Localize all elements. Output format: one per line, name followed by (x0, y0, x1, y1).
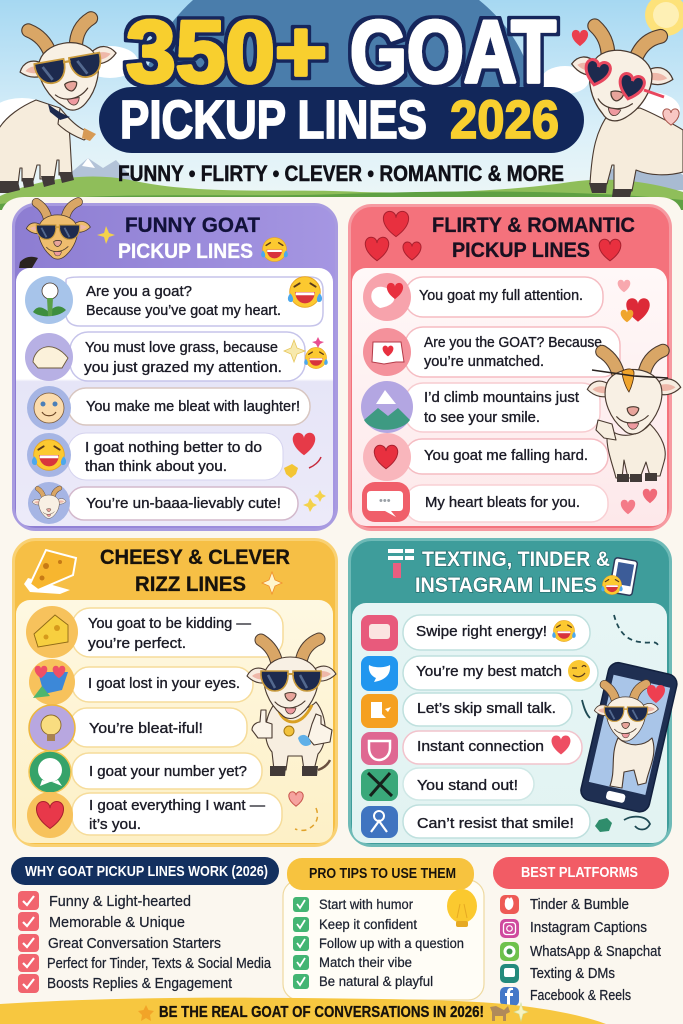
row 2: You’re my best match (416, 664, 562, 680)
panel heading: TEXTING, TINDER & (422, 547, 610, 571)
panel heading (415, 547, 610, 597)
icon: facebook (500, 987, 519, 1006)
platform list (500, 895, 661, 1006)
section pill: PRO TIPS TO USE THEM (309, 865, 456, 882)
small heart right (663, 109, 679, 125)
green hills (0, 177, 683, 210)
row 1: you’re perfect. (88, 636, 186, 652)
row 3: I’d climb mountains just (424, 390, 579, 406)
panel heading (432, 213, 635, 262)
platform list: Instagram Captions (530, 920, 647, 936)
section: pro tips (283, 858, 484, 1000)
goat: left with sunglasses (0, 15, 125, 193)
section pill (287, 858, 474, 890)
row 6 (361, 805, 590, 838)
checklist: Great Conversation Starters (48, 936, 221, 952)
message bars icon (388, 549, 414, 578)
checklist (18, 891, 272, 993)
row 1: You goat my full attention. (419, 288, 583, 304)
sun (645, 0, 683, 36)
icon: tiny goat (490, 1006, 510, 1021)
title pill: pickup lines 2026: PICKUP LINES (120, 90, 427, 150)
platform list: Texting & DMs (530, 966, 615, 982)
footer text: BE THE REAL GOAT OF CONVERSATIONS IN 2026! (159, 1004, 484, 1021)
checklist: Memorable & Unique (49, 915, 185, 931)
panel: cheesy and clever rizz lines (14, 540, 336, 846)
row 2: Are you the GOAT? Because (424, 335, 602, 351)
row 5: You’re un-baaa-lievably cute! (86, 496, 281, 512)
checklist: Perfect for Tinder, Texts & Social Media (47, 956, 272, 972)
row 5: My heart bleats for you. (425, 495, 580, 511)
sparkles (97, 226, 115, 244)
row 5 (27, 792, 282, 838)
platform list: Facebook & Reels (530, 988, 631, 1004)
row 2: I goat lost in your eyes. (88, 676, 240, 692)
row 4 (29, 751, 262, 793)
row 4 (361, 731, 582, 765)
header banner (0, 0, 683, 210)
header hearts (365, 211, 621, 261)
checklist: Funny & Light-hearted (49, 894, 191, 910)
row 4 (363, 433, 608, 481)
row 4 (27, 433, 321, 480)
subtitle: FUNNY • FLIRTY • CLEVER • ROMANTIC & MORE (118, 161, 564, 186)
tips checklist: Be natural & playful (319, 974, 433, 989)
tips checklist: Keep it confident (319, 917, 417, 932)
heart sunglasses (582, 58, 664, 102)
row 4: I goat nothing better to do (85, 440, 262, 456)
row 2: you’re unmatched. (424, 354, 544, 370)
row 5 (361, 768, 534, 801)
panel: texting tinder and instagram lines (350, 540, 683, 846)
phone with goat (569, 658, 683, 816)
goat head mascot (19, 202, 90, 268)
icon: tinder (500, 895, 519, 914)
tips checklist: Start with humor (319, 897, 413, 912)
panel heading (100, 545, 290, 596)
scattered hearts (618, 280, 657, 514)
mountains (0, 132, 683, 190)
goat with heart glasses (587, 351, 681, 482)
platform list: Tinder & Bumble (530, 897, 629, 913)
panel heading: RIZZ LINES (135, 572, 246, 596)
sky backdrop (0, 0, 683, 205)
icon: star (138, 1005, 154, 1021)
panel heading: PICKUP LINES (452, 238, 590, 262)
goat on phone screen (594, 684, 665, 788)
checklist: Boosts Replies & Engagement (47, 976, 232, 992)
row 5: it’s you. (89, 817, 141, 833)
section: best platforms (493, 857, 669, 1006)
panel heading: FUNNY GOAT (125, 213, 260, 237)
row 3 (29, 705, 247, 751)
platform list: WhatsApp & Snapchat (530, 944, 661, 960)
row 4: than think about you. (85, 459, 227, 475)
row 4: Instant connection (417, 739, 544, 755)
row 1 (361, 615, 590, 651)
title line: 350+ GOAT (126, 2, 556, 101)
small heart and arrow (289, 792, 318, 830)
panel: flirty and romantic pickup lines (350, 206, 681, 530)
dashed squiggles (582, 615, 658, 830)
panel heading (118, 213, 288, 263)
row 6: Can’t resist that smile! (417, 816, 574, 832)
row 2: you just grazed my attention. (84, 360, 282, 376)
row 1: Because you’ve goat my heart. (86, 303, 281, 319)
panel heading: PICKUP LINES (118, 239, 253, 263)
row 1: Swipe right energy! (416, 624, 547, 640)
section pill (493, 857, 669, 889)
footer banner (0, 998, 606, 1024)
row 2 (25, 332, 328, 381)
icon: light bulb (447, 889, 477, 927)
row 1 (26, 606, 283, 658)
tips checklist (293, 897, 464, 989)
row 3: You’re bleat-iful! (89, 721, 203, 737)
clouds (0, 46, 680, 138)
icon: instagram (500, 919, 519, 938)
cheese icon (24, 550, 76, 594)
row 1 (25, 276, 323, 326)
icon: whatsapp (500, 942, 519, 961)
tips checklist: Match their vibe (319, 955, 412, 970)
section pill: BEST PLATFORMS (521, 864, 638, 881)
row 2 (29, 659, 253, 705)
row 1 (363, 273, 603, 321)
small heart (572, 30, 588, 46)
tips checklist: Follow up with a question (319, 936, 464, 951)
icon: texting (500, 964, 519, 983)
row 3 (361, 693, 572, 728)
title word: GOAT (350, 2, 556, 101)
goat: right with heart glasses (563, 22, 683, 197)
icon: sparkle (514, 1003, 528, 1021)
title number: 350+ (126, 2, 327, 101)
row 4: I goat your number yet? (89, 764, 247, 780)
panel: funny goat pickup lines (14, 202, 336, 530)
sparkle (262, 572, 282, 594)
dark blue dome (140, 0, 535, 100)
row 3: You make me bleat with laughter! (86, 399, 300, 415)
row 2: You must love grass, because (85, 340, 278, 356)
section pill (11, 857, 279, 885)
section pill: WHY GOAT PICKUP LINES WORK (2026) (25, 863, 268, 880)
row 3: to see your smile. (424, 410, 540, 426)
row 3 (361, 381, 600, 433)
panel heading: INSTAGRAM LINES (415, 573, 597, 597)
goat with sunglasses and chain (247, 639, 336, 776)
row 3: Let’s skip small talk. (417, 701, 556, 717)
row 5 (362, 482, 608, 522)
row 3 (27, 386, 310, 430)
row 5: You stand out! (417, 778, 518, 794)
phone icon with emoji (601, 557, 638, 596)
row 5: I goat everything I want — (89, 798, 266, 814)
row 1: Are you a goat? (86, 284, 192, 300)
title pill: pickup lines 2026: 2026 (450, 90, 559, 150)
green splat (595, 818, 612, 832)
row 2 (363, 327, 620, 377)
row 4: You goat me falling hard. (424, 448, 588, 464)
row 5 (28, 482, 326, 524)
panel heading: FLIRTY & ROMANTIC (432, 213, 635, 237)
row 2 (361, 656, 598, 691)
panel heading: CHEESY & CLEVER (100, 545, 290, 569)
row 5: ••• (379, 495, 391, 507)
section: why goat pickup lines work (11, 857, 279, 993)
row 1: You goat to be kidding — (88, 616, 251, 632)
